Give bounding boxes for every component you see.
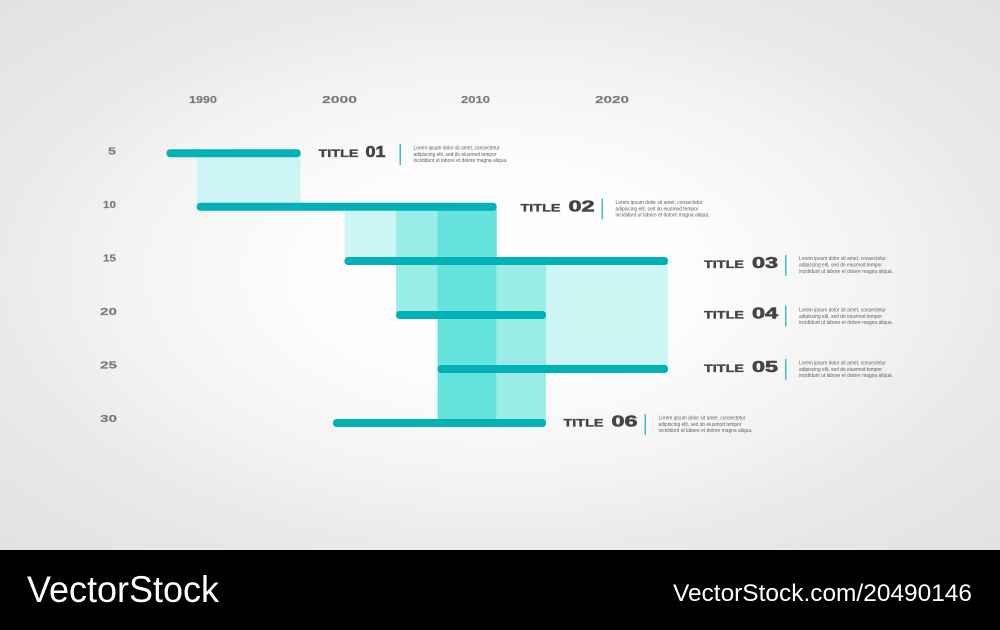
label: title 01 [318, 144, 508, 165]
label: title 06: 06 [612, 414, 638, 430]
label: title 05: TITLE [704, 363, 744, 375]
label: title 02: 02 [568, 198, 594, 216]
label: title 05 [704, 359, 893, 380]
y-axis value labels: 30 [100, 414, 118, 425]
label: title 05: adipiscing elit, sed do eiusmod tempor [799, 367, 882, 373]
label: title 04: 04 [752, 306, 779, 323]
label: title 06: Lorem ipsum dolor sit amet, consectetur [658, 416, 746, 422]
label: title 06 [564, 414, 752, 435]
label: title 01: 01 [366, 144, 386, 161]
label: title 04 [704, 306, 893, 326]
label: title 03: Lorem ipsum dolor sit amet, consectetur [799, 256, 886, 262]
label: title 03: incididunt ut labore et dolore magna aliqua. [799, 269, 893, 275]
label: title 04: adipiscing elit, sed do eiusmod tempor [799, 314, 882, 320]
label: title 06: TITLE [564, 418, 604, 430]
label: title 06: adipiscing elit, sed do eiusmod tempor [658, 422, 742, 428]
label: title 03: TITLE [704, 259, 744, 271]
label: title 05: incididunt ut labore et dolore magna aliqua. [799, 373, 893, 379]
x-axis year labels: 2020 [595, 95, 630, 106]
x-axis year labels: 2000 [322, 95, 358, 106]
y-axis value labels [100, 146, 118, 425]
footer band: VectorStock.com/20490146 [673, 580, 972, 607]
label: title 01: incididunt ut labore et dolore magna aliqua. [414, 158, 508, 164]
y-axis value labels: 15 [103, 254, 117, 264]
label: title 05: 05 [752, 359, 779, 376]
label: title 02: TITLE [520, 202, 560, 214]
label: title 06: incididunt ut labore et dolore magna aliqua. [658, 428, 752, 434]
label: title 04: TITLE [704, 310, 744, 322]
label: title 04: Lorem ipsum dolor sit amet, consectetur [799, 308, 886, 314]
x-axis year labels [189, 95, 630, 106]
label: title 03 [704, 255, 893, 276]
x-axis year labels: 1990 [189, 95, 218, 106]
footer band: VectorStock [27, 569, 219, 610]
y-axis value labels: 25 [100, 360, 118, 372]
y-axis value labels: 20 [100, 307, 118, 318]
y-axis value labels: 10 [103, 200, 117, 211]
x-axis year labels: 2010 [461, 95, 491, 106]
label: title 02: incididunt ut labore et dolore magna aliqua. [616, 212, 710, 218]
y-axis value labels: 5 [108, 146, 117, 158]
overlap bands [197, 155, 668, 421]
label: title 03: adipiscing elit, sed do eiusmod tempor [799, 262, 882, 268]
label: title 02: Lorem ipsum dolor sit amet, consectetur [616, 200, 703, 206]
label: title 02: adipiscing elit, sed do eiusmod tempor [616, 206, 699, 212]
label: title 05: Lorem ipsum dolor sit amet, consectetur [799, 360, 886, 366]
timeline bars [166, 149, 668, 427]
label: title 01: TITLE [318, 148, 358, 160]
label: title 01: Lorem ipsum dolor sit amet, consectetur [414, 146, 500, 152]
label: title 03: 03 [752, 255, 778, 272]
label: title 01: adipiscing elit, sed do eiusmod tempor [414, 152, 497, 158]
label: title 02 [520, 198, 710, 220]
footer band [0, 550, 1000, 630]
label: title 04: incididunt ut labore et dolore magna aliqua. [799, 320, 893, 326]
